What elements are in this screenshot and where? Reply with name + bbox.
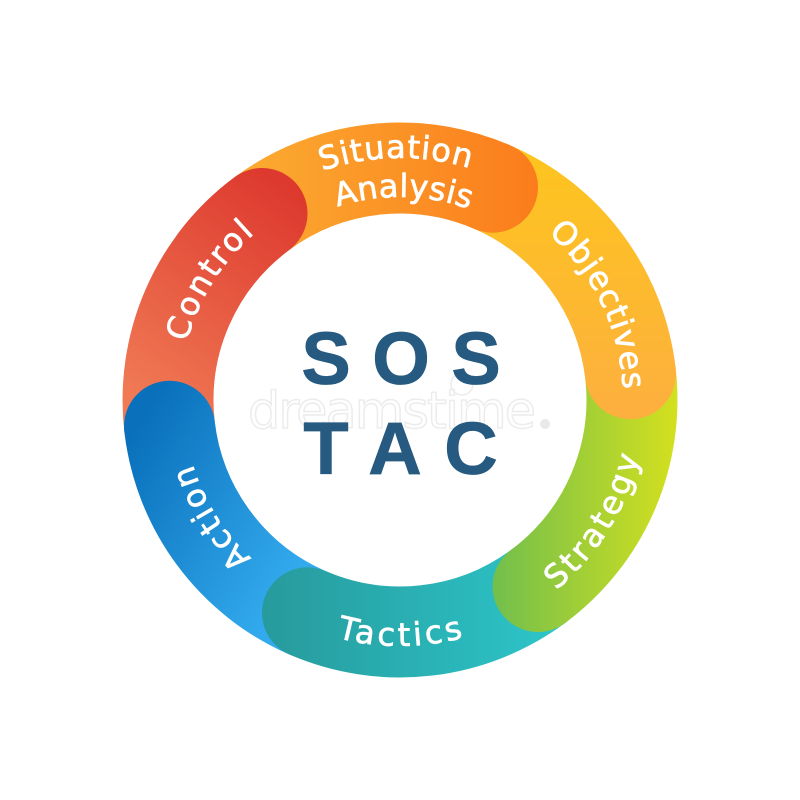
center title: SOS: SOS (301, 317, 501, 400)
label: Action: Action (178, 466, 252, 568)
label: Analysis: Analysis (337, 172, 472, 208)
segment: Control (body beneath neighbours) (168, 214, 262, 426)
center title: TAC: TAC (303, 407, 498, 490)
segment: Tactics (268, 548, 570, 678)
label: Tactics: Tactics (340, 614, 462, 646)
segment: Control (top end and label) (166, 171, 302, 338)
label: Objectives: Objectives (553, 221, 641, 388)
label: Strategy: Strategy (544, 452, 643, 588)
watermark: dreamstime (248, 382, 536, 441)
segment: Objectives (472, 147, 676, 420)
segment: Action (124, 386, 328, 653)
label: Situation: Situation (318, 134, 471, 170)
label: Control: Control (166, 217, 253, 338)
segment: Situation Analysis (232, 122, 533, 251)
segment: Strategy (496, 364, 678, 632)
